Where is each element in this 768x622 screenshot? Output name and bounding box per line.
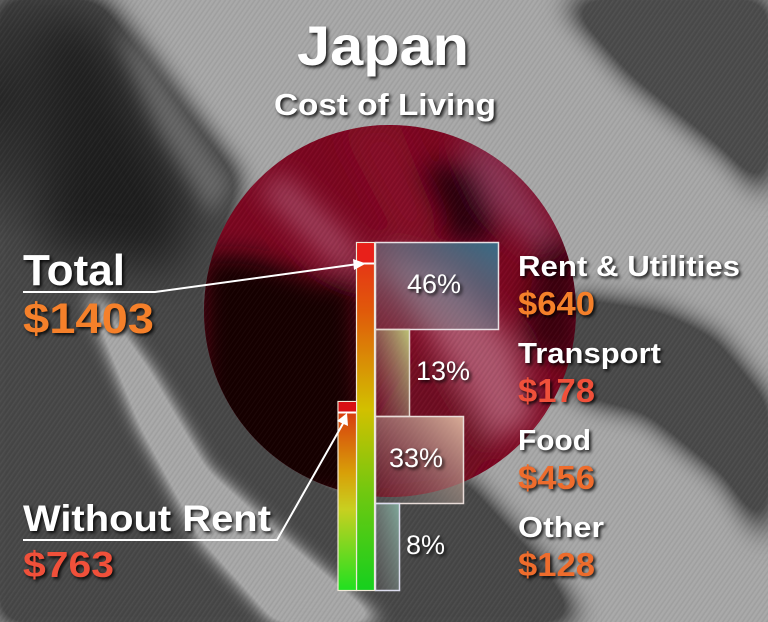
callout: total: $1403	[23, 295, 154, 343]
callout: without rent: $763	[23, 544, 114, 585]
percent: 13%: 13%	[416, 356, 470, 386]
title: Japan	[297, 14, 469, 77]
box: other 8%	[376, 504, 400, 590]
label: rent and utilities: $640	[518, 285, 595, 322]
box: rent 46%	[376, 242, 498, 330]
label: transport: $178	[518, 372, 595, 409]
bar: total cost gradient	[356, 242, 374, 590]
callout: without rent: Without Rent	[23, 498, 271, 539]
label: transport: Transport	[518, 338, 661, 370]
box: transport 13%	[376, 330, 410, 416]
label: food: $456	[518, 459, 595, 496]
label: rent and utilities	[518, 251, 740, 322]
box: food 33%	[376, 416, 464, 504]
label: food	[518, 425, 595, 496]
subtitle: Cost of Living	[274, 87, 496, 122]
label: other: $128	[518, 546, 595, 583]
bar: without rent gradient	[338, 402, 356, 590]
label: other: Other	[518, 512, 604, 544]
callout: without rent	[23, 412, 356, 585]
label: other	[518, 512, 604, 583]
label: rent and utilities: Rent & Utilities	[518, 251, 740, 283]
percent: 33%: 33%	[389, 443, 443, 473]
callout: total: Total	[23, 246, 125, 295]
panel: cost breakdown boxes	[376, 242, 498, 590]
percent: 8%: 8%	[406, 530, 445, 560]
label: transport	[518, 338, 661, 409]
percent: 46%: 46%	[407, 269, 461, 299]
label: food: Food	[518, 425, 591, 457]
callout: total	[23, 246, 374, 343]
red sun disc	[200, 120, 580, 502]
